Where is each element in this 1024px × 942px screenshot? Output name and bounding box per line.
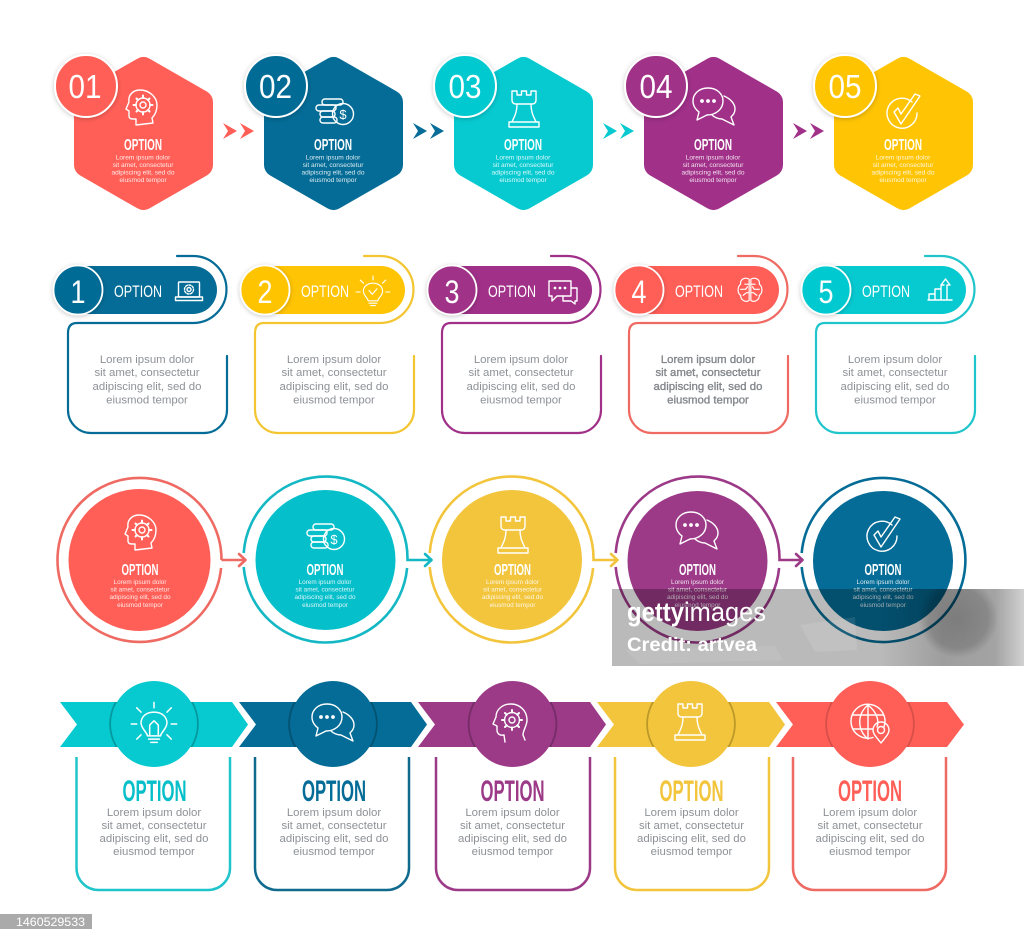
arrow: chevrons 4 bbox=[793, 123, 824, 139]
hexagon step 04: OPTION bbox=[694, 137, 732, 154]
circle step 2: eiusmod tempor bbox=[302, 602, 349, 609]
hexagon step 01: eiusmod tempor bbox=[119, 177, 167, 184]
ribbon card 2: sit amet, consectetur bbox=[281, 820, 387, 832]
pill card 4: adipiscing elit, sed do bbox=[654, 381, 762, 393]
circle step 3: Lorem ipsum dolor bbox=[486, 579, 540, 586]
hexagon step 02: Lorem ipsum dolor bbox=[306, 154, 361, 161]
hexagon step 04: 04 bbox=[640, 68, 672, 105]
pill card 5: eiusmod tempor bbox=[854, 395, 936, 407]
circle step 4: OPTION bbox=[679, 562, 716, 579]
pill card 4: 4 bbox=[632, 274, 646, 310]
ribbon card 3: sit amet, consectetur bbox=[460, 820, 565, 832]
pill card 3: Lorem ipsum dolor bbox=[474, 354, 568, 366]
circle step 3: OPTION bbox=[494, 562, 531, 579]
row 2: pill header cards bbox=[53, 256, 975, 433]
circle step 4: sit amet, consectetur bbox=[668, 586, 728, 594]
pill card 1: Lorem ipsum dolor bbox=[100, 354, 194, 366]
hexagon step 02: OPTION bbox=[314, 137, 352, 154]
ribbon card 2: OPTION bbox=[302, 775, 366, 808]
arrow: chevrons 3 bbox=[603, 123, 634, 139]
circle step 2: Lorem ipsum dolor bbox=[299, 579, 352, 586]
circle step 2: OPTION bbox=[306, 562, 344, 579]
circle step 1: eiusmod tempor bbox=[117, 602, 164, 609]
ribbon card 2 bbox=[239, 679, 427, 890]
ribbon card 1: adipiscing elit, sed do bbox=[100, 833, 208, 845]
hexagon step 04: adipiscing elit, sed do bbox=[681, 170, 745, 176]
watermark band bbox=[612, 589, 1024, 666]
pill card 1: sit amet, consectetur bbox=[94, 367, 200, 379]
hexagon step 01 bbox=[55, 55, 201, 198]
ribbon card 1: eiusmod tempor bbox=[113, 846, 195, 858]
pill card 4: OPTION bbox=[675, 283, 723, 301]
hexagon step 05: sit amet, consectetur bbox=[873, 162, 934, 169]
image id tag bbox=[0, 914, 92, 929]
ribbon card 3: eiusmod tempor bbox=[472, 846, 554, 858]
circle step 4: eiusmod tempor bbox=[675, 602, 721, 609]
ribbon card 5: Lorem ipsum dolor bbox=[823, 807, 917, 819]
pill card 5: sit amet, consectetur bbox=[842, 367, 948, 379]
row 1: hexagon steps bbox=[55, 55, 961, 198]
pill card 4: sit amet, consectetur bbox=[655, 367, 761, 379]
ribbon card 4: Lorem ipsum dolor bbox=[644, 807, 739, 819]
pill card 1: adipiscing elit, sed do bbox=[93, 381, 201, 393]
hexagon step 01: adipiscing elit, sed do bbox=[111, 170, 175, 176]
circle step 5: adipiscing elit, sed do bbox=[852, 594, 914, 601]
circle step 1 bbox=[58, 478, 245, 642]
pill card 3: 3 bbox=[444, 274, 460, 310]
ribbon card 5: OPTION bbox=[838, 775, 902, 808]
hexagon step 03: 03 bbox=[448, 68, 482, 105]
circle step 5: eiusmod tempor bbox=[860, 602, 907, 609]
ribbon card 3: OPTION bbox=[480, 775, 544, 808]
pill card 2: sit amet, consectetur bbox=[281, 367, 387, 379]
circle step 2: sit amet, consectetur bbox=[296, 586, 355, 594]
pill card 5 bbox=[801, 256, 975, 433]
pill card 5: 5 bbox=[818, 274, 834, 310]
ribbon card 5: eiusmod tempor bbox=[829, 846, 911, 858]
pill card 1: eiusmod tempor bbox=[106, 395, 188, 407]
ribbon card 2: Lorem ipsum dolor bbox=[287, 807, 381, 819]
pill card 3: OPTION bbox=[488, 283, 536, 301]
circle step 2: $ bbox=[330, 532, 338, 547]
watermark band: getty bbox=[627, 597, 684, 627]
circle step 3 bbox=[430, 477, 618, 643]
ribbon card 5: sit amet, consectetur bbox=[817, 820, 923, 832]
row 3: ringed circles with arrows bbox=[58, 477, 965, 643]
arrow: chevrons 1 bbox=[223, 123, 254, 139]
pill card 1: OPTION bbox=[114, 283, 162, 301]
circle step 3: sit amet, consectetur bbox=[483, 586, 543, 594]
ribbon card 1: Lorem ipsum dolor bbox=[107, 807, 201, 819]
pill card 5: OPTION bbox=[862, 283, 910, 301]
hexagon step 03: sit amet, consectetur bbox=[493, 162, 554, 169]
ribbon card 4: OPTION bbox=[660, 775, 724, 808]
ribbon card 1: sit amet, consectetur bbox=[101, 820, 207, 832]
pill card 2: eiusmod tempor bbox=[293, 395, 375, 407]
pill card 3: adipiscing elit, sed do bbox=[467, 381, 575, 393]
ribbon card 4 bbox=[597, 679, 785, 890]
ribbon card 2: adipiscing elit, sed do bbox=[280, 833, 388, 845]
hexagon step 05: adipiscing elit, sed do bbox=[871, 170, 935, 176]
hexagon step 01: sit amet, consectetur bbox=[113, 162, 174, 169]
ribbon card 4: adipiscing elit, sed do bbox=[637, 833, 746, 845]
hexagon step 05: 05 bbox=[828, 68, 862, 105]
ribbon card 3: adipiscing elit, sed do bbox=[458, 833, 567, 845]
pill card 3: sit amet, consectetur bbox=[468, 367, 574, 379]
hexagon step 03 bbox=[434, 55, 581, 198]
hexagon step 05: eiusmod tempor bbox=[879, 177, 927, 184]
pill card 3 bbox=[427, 256, 601, 433]
ribbon card 2: eiusmod tempor bbox=[293, 846, 375, 858]
hexagon step 02: 02 bbox=[259, 68, 292, 105]
ribbon card 5 bbox=[776, 679, 964, 890]
row 4: ribbon arrows with cards bbox=[60, 679, 964, 890]
circle step 2: adipiscing elit, sed do bbox=[294, 594, 356, 601]
circle step 1: OPTION bbox=[122, 562, 158, 579]
circle step 5: Lorem ipsum dolor bbox=[857, 579, 910, 586]
circle step 4 bbox=[616, 477, 802, 643]
hexagon step 02: $ bbox=[339, 107, 347, 122]
ribbon card 4: sit amet, consectetur bbox=[639, 820, 744, 832]
pill card 2: adipiscing elit, sed do bbox=[280, 381, 388, 393]
watermark band: images bbox=[684, 597, 766, 627]
ribbon card 1: OPTION bbox=[122, 775, 186, 808]
image id tag: 1460529533 bbox=[16, 915, 85, 929]
circle step 5: OPTION bbox=[864, 562, 902, 579]
circle step 2 bbox=[244, 477, 432, 643]
ribbon card 3: Lorem ipsum dolor bbox=[465, 807, 560, 819]
watermark band: Credit: artvea bbox=[627, 635, 757, 656]
hexagon step 03: Lorem ipsum dolor bbox=[496, 154, 551, 161]
pill card 2 bbox=[240, 256, 414, 433]
ribbon card 3 bbox=[418, 679, 606, 890]
pill card 2: 2 bbox=[258, 274, 272, 310]
ribbon card 1 bbox=[60, 679, 248, 890]
pill card 3: eiusmod tempor bbox=[480, 395, 562, 407]
circle step 3: eiusmod tempor bbox=[490, 602, 536, 609]
pill card 2: Lorem ipsum dolor bbox=[287, 354, 381, 366]
circle step 4: adipiscing elit, sed do bbox=[667, 594, 728, 601]
circle step 1: adipiscing elit, sed do bbox=[109, 594, 171, 601]
pill card 5: Lorem ipsum dolor bbox=[848, 354, 942, 366]
pill card 5: adipiscing elit, sed do bbox=[841, 381, 949, 393]
arrow: chevrons 2 bbox=[413, 123, 444, 139]
hexagon step 03: adipiscing elit, sed do bbox=[491, 170, 555, 176]
circle step 4: Lorem ipsum dolor bbox=[671, 579, 725, 586]
circle step 3: adipiscing elit, sed do bbox=[482, 594, 543, 601]
pill card 4: Lorem ipsum dolor bbox=[661, 354, 755, 366]
ribbon card 4: eiusmod tempor bbox=[651, 846, 733, 858]
hexagon step 02: adipiscing elit, sed do bbox=[301, 170, 365, 176]
pill card 1: 1 bbox=[70, 274, 86, 310]
hexagon step 05 bbox=[814, 55, 961, 198]
circle step 1: sit amet, consectetur bbox=[111, 586, 170, 594]
hexagon step 02 bbox=[245, 55, 391, 198]
hexagon step 04 bbox=[625, 55, 771, 198]
circle step 5: sit amet, consectetur bbox=[854, 586, 913, 594]
hexagon step 03: eiusmod tempor bbox=[499, 177, 547, 184]
hexagon step 05: OPTION bbox=[884, 137, 922, 154]
hexagon step 03: OPTION bbox=[504, 137, 542, 154]
hexagon step 01: 01 bbox=[68, 68, 102, 105]
hexagon step 01: Lorem ipsum dolor bbox=[116, 154, 171, 161]
circle step 5 bbox=[802, 478, 965, 642]
pill card 1 bbox=[53, 256, 227, 433]
hexagon step 05: Lorem ipsum dolor bbox=[876, 154, 931, 161]
pill card 2: OPTION bbox=[301, 283, 349, 301]
hexagon step 04: eiusmod tempor bbox=[689, 177, 737, 184]
hexagon step 02: eiusmod tempor bbox=[309, 177, 357, 184]
circle step 1: Lorem ipsum dolor bbox=[114, 579, 167, 586]
pill card 4 bbox=[614, 256, 788, 433]
hexagon step 01: OPTION bbox=[124, 137, 162, 154]
pill card 4: eiusmod tempor bbox=[667, 395, 749, 407]
hexagon step 02: sit amet, consectetur bbox=[303, 162, 364, 169]
hexagon step 04: Lorem ipsum dolor bbox=[686, 154, 741, 161]
ribbon card 5: adipiscing elit, sed do bbox=[816, 833, 924, 845]
hexagon step 04: sit amet, consectetur bbox=[683, 162, 744, 169]
